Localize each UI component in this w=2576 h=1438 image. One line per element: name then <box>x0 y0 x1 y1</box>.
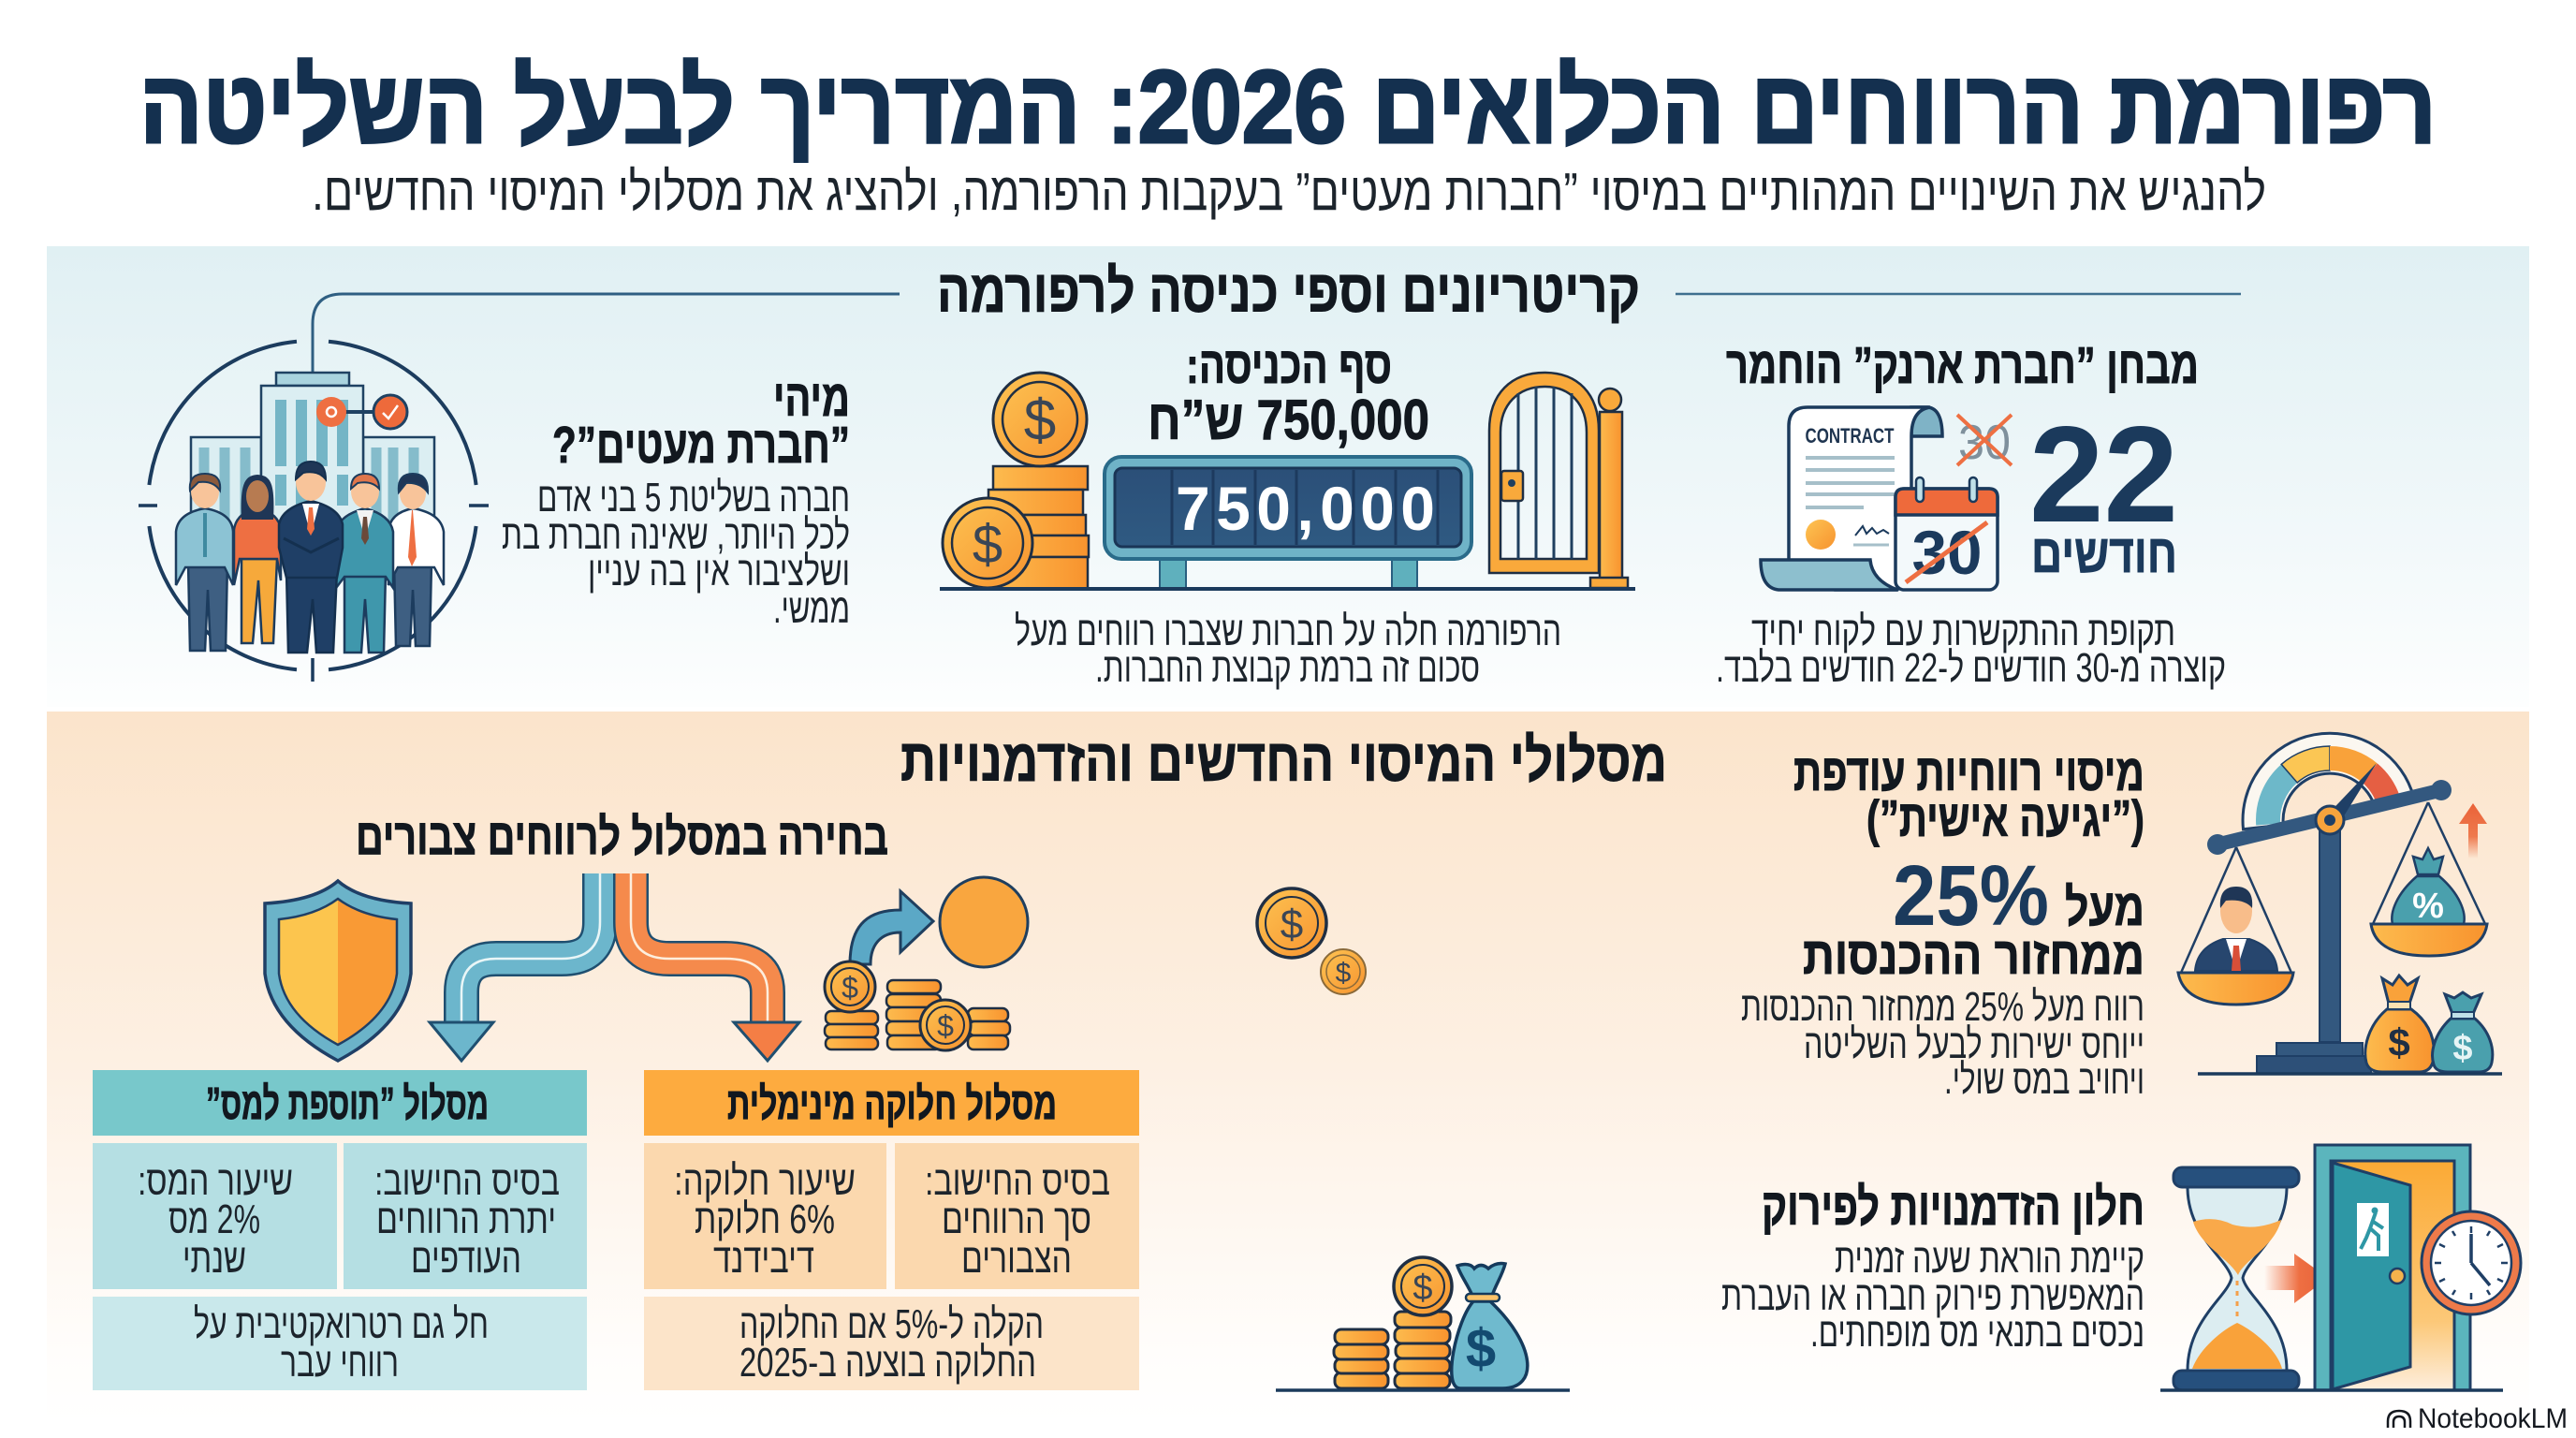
text: shell test description <box>1716 609 2226 691</box>
icon: team and building in circle <box>139 342 489 682</box>
cell: calculation basis: סך הרווחים <box>942 1196 1091 1242</box>
heading: liquidation window: חלון הזדמנויות לפירוק <box>1762 1178 2144 1236</box>
icon: contract: CONTRACT <box>1805 424 1895 448</box>
heading: new tax tracks: מסלולי המיסוי החדשים והזדמנויות <box>900 726 1667 794</box>
header: tax addition track <box>93 1070 587 1136</box>
icon: coin stacks and money bag: $ <box>1466 1318 1496 1379</box>
heading: entry threshold: 750,000 ש”ח <box>1148 389 1429 451</box>
heading: excess profitability: מיסוי רווחיות עודפת <box>1793 743 2144 801</box>
icon: scale with gauge: % <box>2412 887 2444 926</box>
connector line left of heading to building icon <box>313 294 900 372</box>
stat: over 25 percent <box>1803 848 2144 985</box>
cell: calculation basis <box>895 1143 1139 1289</box>
block: what is a closely held company <box>139 342 850 682</box>
icon: scale with gauge <box>2178 733 2502 1074</box>
title: רפורמת הרווחים הכלואים 2026: המדריך לבעל השליטה <box>139 50 2437 165</box>
icon: crossed out 30: 30 <box>1958 416 2011 470</box>
text: liquidation description: המאפשרת פירוק חברה או העברת <box>1721 1273 2144 1319</box>
heading: what is closely held <box>552 369 850 474</box>
text: threshold description: הרפורמה חלה על חברות שצברו רווחים מעל <box>1015 609 1561 654</box>
stat: over 25 percent: 25% <box>1893 848 2049 944</box>
text: excess profitability description: רווח מעל 25% ממחזור ההכנסות <box>1741 984 2144 1030</box>
heading: entry threshold: סף הכניסה: <box>1186 336 1392 394</box>
ground line <box>940 587 1635 591</box>
heading: entry threshold <box>1148 336 1429 451</box>
icon: dividend coins and arrow <box>825 877 1028 1050</box>
cell: retroactive note: חל גם רטרואקטיבית על <box>194 1301 489 1347</box>
icon: clock <box>2422 1211 2521 1314</box>
cell: relief note <box>644 1297 1139 1390</box>
logo: NotebookLM: NotebookLM <box>2418 1403 2568 1434</box>
icon: falling coins: $ <box>1336 958 1352 989</box>
cell: calculation basis: בסיס החישוב: <box>374 1158 560 1204</box>
icon: gate <box>1489 373 1628 588</box>
heading: shell test: מבחן ”חברת ארנק” הוחמר <box>1726 336 2199 394</box>
stat: over 25 percent: ממחזור ההכנסות <box>1803 926 2144 985</box>
header text: מסלול ”תוספת למס” <box>206 1079 489 1129</box>
person 5 <box>388 474 444 646</box>
person 4 <box>336 474 393 653</box>
text: liquidation description: נכסים בתנאי מס מופחתים. <box>1810 1310 2144 1356</box>
panel: tax tracks background <box>47 712 2529 1423</box>
icon: number board <box>1105 457 1471 589</box>
block: shell company test <box>1716 336 2226 691</box>
icon: scale with gauge: $ <box>2452 1029 2473 1068</box>
icon: hourglass <box>2174 1167 2299 1390</box>
icon: coin stacks and money bag <box>1276 1257 1570 1390</box>
icon: exit door <box>2315 1145 2470 1390</box>
panel: criteria background <box>47 246 2529 707</box>
icon: number board: 750,000 <box>1176 474 1435 543</box>
text: threshold description <box>1015 609 1561 691</box>
icon: dividend coins and arrow: $ <box>842 971 858 1005</box>
cell: distribution rate: דיבידנד <box>713 1236 814 1282</box>
icon: scale with gauge: $ <box>2388 1020 2410 1064</box>
cell: calculation basis: יתרת הרווחים <box>376 1196 556 1242</box>
stat: over 25 percent: מעל <box>2065 878 2144 936</box>
stat: 22 months: 22 <box>2029 398 2178 550</box>
cell: calculation basis <box>344 1143 587 1289</box>
text: liquidation description <box>1721 1236 2144 1356</box>
cell: calculation basis: בסיס החישוב: <box>925 1158 1110 1204</box>
text: excess profitability description <box>1741 984 2144 1103</box>
header: minimum distribution <box>644 1070 1139 1136</box>
text: shell test description: תקופת ההתקשרות עם לקוח יחיד <box>1751 609 2175 654</box>
heading: choice of track: בחירה במסלול לרווחים צבורים <box>356 809 888 865</box>
panel: minimum distribution track <box>644 1070 1139 1390</box>
cell: distribution rate <box>644 1143 886 1289</box>
text: closely held definition: חברה בשליטת 5 בני אדם <box>537 475 850 521</box>
cell: calculation basis: העודפים <box>411 1236 521 1282</box>
icon: coin stacks and money bag: $ <box>1412 1269 1433 1308</box>
block: excess profitability tax <box>1741 733 2502 1103</box>
person 1 <box>176 474 233 651</box>
person 2 <box>234 475 281 643</box>
heading: criteria section: קריטריונים וספי כניסה לרפורמה <box>937 257 1640 325</box>
block: entry threshold <box>940 336 1635 691</box>
cell: tax rate: שיעור המס: <box>138 1158 293 1204</box>
stat: 22 months: חודשים <box>2031 523 2177 584</box>
icon: falling coins <box>1257 888 1366 994</box>
cell: tax rate: שנתי <box>183 1236 246 1282</box>
text: closely held definition: לכל היותר, שאינה חברת בת <box>502 512 850 558</box>
text: threshold description: סכום זה ברמת קבוצת החברות. <box>1095 645 1480 691</box>
cell: calculation basis: הצבורים <box>961 1236 1072 1282</box>
connector line right of heading <box>1676 293 2241 295</box>
icon: contract <box>1761 407 1942 590</box>
header text: מסלול חלוקה מינימלית <box>727 1079 1057 1129</box>
cell: distribution rate: 6% חלוקת <box>695 1196 835 1242</box>
heading: what is closely held: ”חברת מעטים”? <box>552 416 850 474</box>
heading: excess profitability <box>1793 743 2144 847</box>
text: shell test description: קוצרה מ-30 חודשים ל-22 חודשים בלבד. <box>1716 645 2226 691</box>
text: excess profitability description: ייוחס ישירות לבעל השליטה <box>1804 1021 2144 1067</box>
cell: tax rate <box>93 1143 337 1289</box>
arrow: toward door <box>2264 1254 2328 1303</box>
cell: distribution rate: שיעור חלוקה: <box>674 1158 856 1204</box>
heading: excess profitability: (”יגיעה אישית”) <box>1866 789 2144 847</box>
text: liquidation description: קיימת הוראת שעה זמנית <box>1835 1236 2144 1282</box>
cell: relief note: החלוקה בוצעה ב-2025 <box>739 1340 1036 1386</box>
icon: calendar <box>1895 477 1998 590</box>
text: closely held definition <box>502 475 850 632</box>
text: closely held definition: ושלציבור אין בה עניין <box>588 549 850 594</box>
cell: retroactive note: רווחי עבר <box>281 1340 399 1386</box>
block: liquidation window <box>1721 1145 2521 1390</box>
text: excess profitability description: ויחויב במס שולי. <box>1944 1057 2144 1103</box>
icon: coin stack: $ <box>1024 389 1056 453</box>
icon: shield <box>265 881 411 1061</box>
ground line <box>2160 1388 2503 1392</box>
cell: tax rate: 2% מס <box>168 1196 260 1242</box>
panel: tax addition track <box>93 1070 587 1390</box>
arrow: blue path down left <box>430 873 600 1061</box>
icon: dividend coins and arrow: $ <box>937 1009 954 1043</box>
icon: calendar: 30 <box>1911 518 1983 587</box>
arrow: orange path down right <box>631 873 799 1061</box>
cell: retroactive note <box>93 1297 587 1390</box>
icon: coin stack <box>943 373 1089 589</box>
icon: falling coins: $ <box>1281 902 1303 947</box>
person 3 <box>279 462 343 653</box>
text: closely held definition: ממשי. <box>773 586 850 632</box>
heading: what is closely held: מיהי <box>773 369 850 427</box>
icon: coin stack: $ <box>973 514 1003 575</box>
cell: relief note: הקלה ל-5% אם החלוקה <box>739 1301 1044 1347</box>
